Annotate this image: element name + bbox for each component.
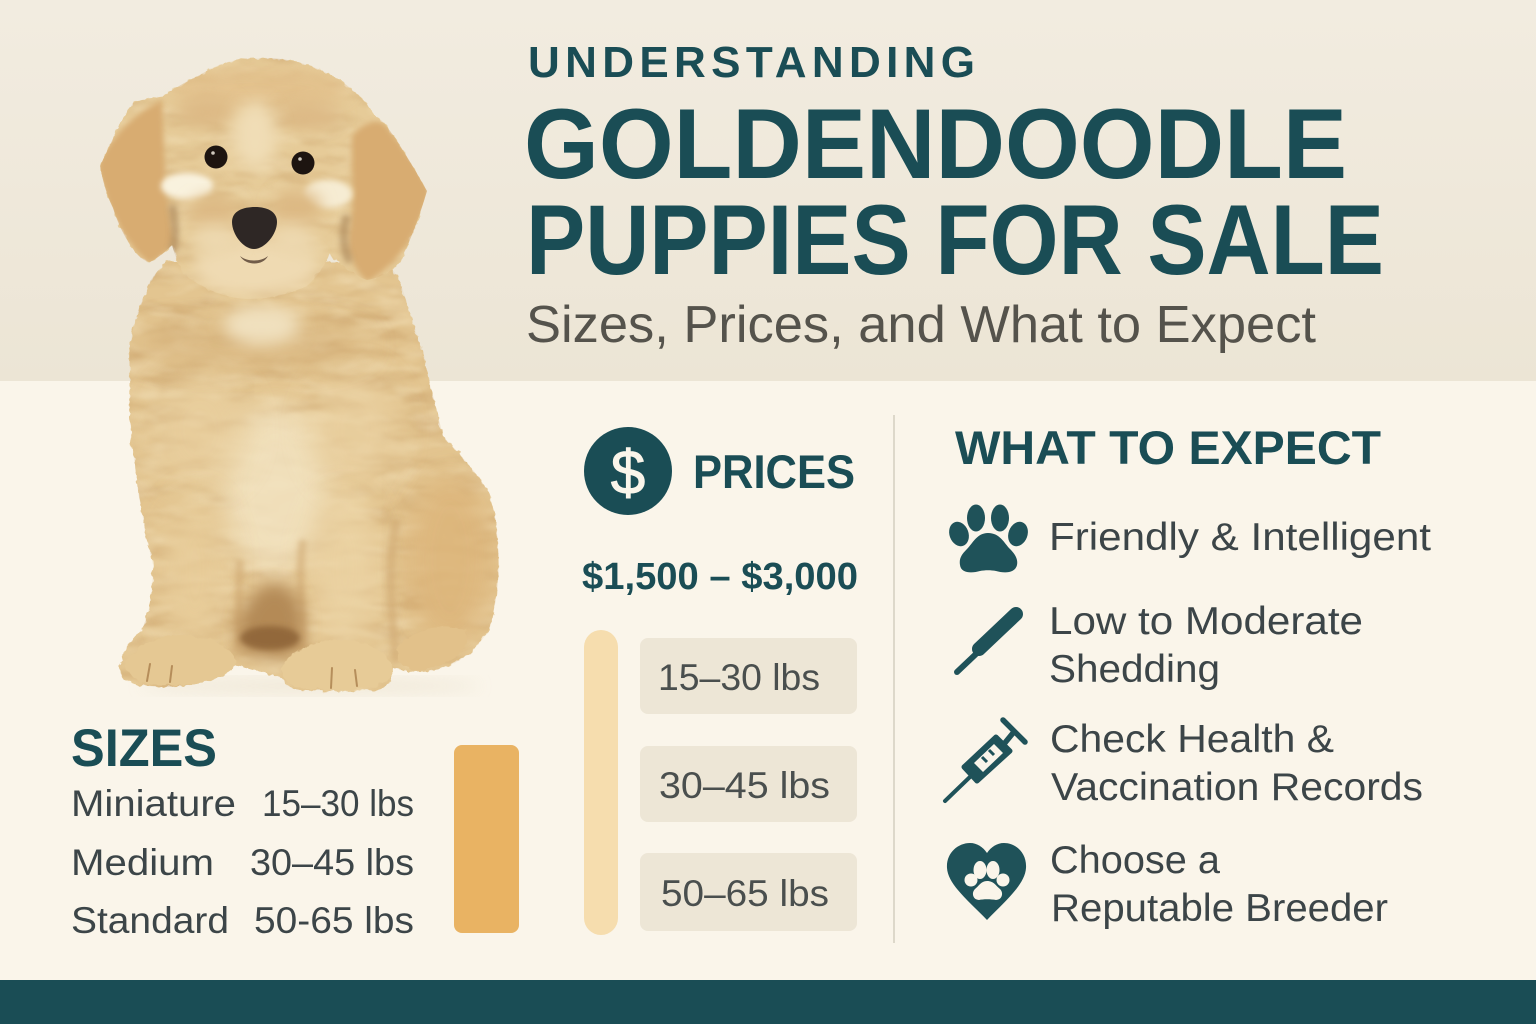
price chip: 30–45 lbs (640, 746, 857, 822)
icon: paw (946, 504, 1031, 572)
background: upper band (0, 0, 1536, 381)
expect text: shedding (1049, 600, 1363, 691)
sizes rows: Medium (71, 842, 214, 883)
sizes rows: Standard (71, 900, 229, 941)
panel: sizes (71, 719, 519, 941)
price range: $1,500 – $3,000 (582, 556, 858, 598)
expect text: health: Check Health & (1050, 718, 1334, 761)
icon: heart with paw (947, 843, 1026, 920)
expect text: health (1050, 718, 1423, 809)
title kicker: UNDERSTANDING (528, 38, 975, 87)
puppy: ears and face shading (95, 55, 430, 300)
puppy: eyes (204, 146, 314, 174)
footer bar (0, 980, 1536, 1024)
expect text: shedding: Low to Moderate (1049, 600, 1363, 643)
price chip: 15–30 lbs (640, 638, 857, 714)
prices heading: PRICES (693, 445, 855, 498)
sizes rows (71, 783, 414, 941)
icon: dollar badge: $ (611, 439, 645, 508)
title: line 1: GOLDENDOODLE (524, 88, 1347, 199)
price scale bar (584, 630, 618, 935)
price chip: 50–65 lbs (640, 853, 857, 931)
puppy: nose and mouth (232, 207, 277, 264)
sizes rows: Miniature (71, 783, 236, 824)
sizes heading: SIZES (71, 719, 217, 778)
sizes rows: 30–45 lbs (250, 842, 414, 883)
price chip: 15–30 lbs: 15–30 lbs (658, 657, 820, 698)
illustration: goldendoodle puppy (95, 55, 510, 700)
icon: dollar badge (584, 427, 672, 515)
puppy: body silhouette (120, 262, 499, 691)
puppy: head silhouette (100, 58, 427, 299)
price chip: 30–45 lbs: 30–45 lbs (659, 765, 830, 806)
expect text: friendly: Friendly & Intelligent (1049, 516, 1431, 559)
expect text: breeder (1050, 839, 1388, 930)
icon: syringe (945, 720, 1025, 801)
title: line 2: PUPPIES FOR SALE (526, 184, 1384, 295)
panel: what to expect (945, 421, 1431, 930)
expect text: shedding: Shedding (1049, 648, 1220, 691)
expect text: breeder: Choose a (1050, 839, 1220, 882)
background: lower panel (0, 381, 1536, 980)
sizes rows: 15–30 lbs (262, 783, 414, 824)
panel: prices (582, 427, 858, 935)
subtitle: Sizes, Prices, and What to Expect (526, 296, 1317, 354)
icon: brush (957, 614, 1016, 672)
puppy: body shading (110, 260, 510, 700)
expect text: breeder: Reputable Breeder (1051, 887, 1388, 930)
puppy: front paws (125, 627, 466, 690)
expect heading: WHAT TO EXPECT (955, 421, 1381, 474)
price chip: 50–65 lbs: 50–65 lbs (661, 873, 829, 914)
puppy: toe lines (147, 664, 357, 688)
sizes bar (454, 745, 519, 933)
sizes rows: 50-65 lbs (254, 900, 414, 941)
expect text: health: Vaccination Records (1051, 766, 1423, 809)
